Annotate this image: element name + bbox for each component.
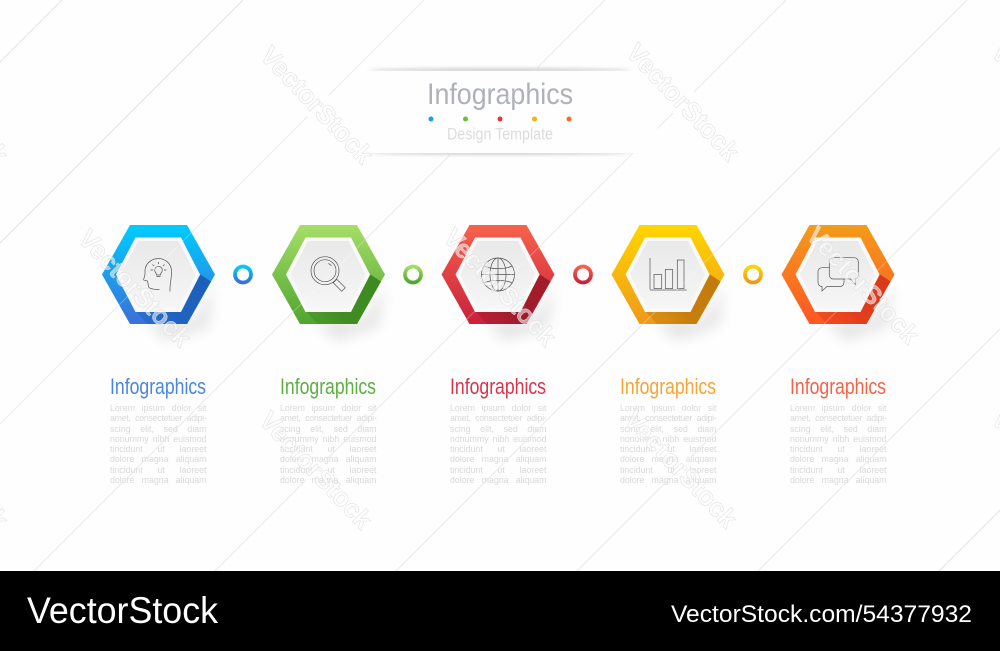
step 4 body text: tincidunt ut laoreet [620,444,716,454]
step 4 body text: tincidunt ut laoreet [620,465,716,475]
step 1 hexagon: blue [102,225,215,340]
icon: globe [482,258,514,291]
step 4 body text: amet, consectetuer adipi- [620,413,716,423]
title panel [332,68,668,155]
title text: Infographics [427,78,573,111]
connector ring 1 [235,266,251,282]
step 3 body text: dolore magna aliquam [450,475,546,485]
watermark overlay: VectorStock [800,220,926,350]
subtitle text: Design Template [447,124,553,144]
step 3 heading: Infographics [450,374,546,399]
step 1 heading: Infographics [110,374,206,399]
step 1 body text: Lorem ipsum dolor sit [110,403,206,413]
step 1 body text: nonummy nibh euismod [110,434,206,444]
step 5 body text: amet, consectetuer adipi- [790,413,886,423]
step 3 body text [450,403,546,485]
step 4 body text: Lorem ipsum dolor sit [620,403,716,413]
step 1 body text: dolore magna aliquam [110,475,206,485]
step 2 body text: scing elit, sed diam [280,424,376,434]
step 2 body text: tincidunt ut laoreet [280,465,376,475]
icon: head with light bulb [144,258,172,292]
step 2 body text: dolore magna aliquam [280,454,376,464]
step 1 body text: amet, consectetuer adipi- [110,413,206,423]
step 2 body text: nonummy nibh euismod [280,434,376,444]
watermark overlay: VectorStock [437,222,563,352]
step 4 body text: scing elit, sed diam [620,424,716,434]
icon: bar chart [650,258,687,290]
connector ring 4 [745,266,761,282]
step 5 body text: dolore magna aliquam [790,454,886,464]
connector ring 3 [575,266,591,282]
connector ring 2 [405,266,421,282]
step 5 body text: tincidunt ut laoreet [790,444,886,454]
step 3 hexagon: red [442,225,554,340]
watermark overlay: VectorStock [618,404,744,534]
step 5 hexagon: orange [782,225,894,340]
watermark overlay: VectorStock [254,40,380,170]
step 2 body text [280,403,376,485]
step 3 body text: dolore magna aliquam [450,454,546,464]
watermark overlay: VectorStock [620,37,746,167]
step 1 body text: tincidunt ut laoreet [110,465,206,475]
step 4 body text: dolore magna aliquam [620,475,716,485]
watermark overlay: VectorStock [253,405,379,535]
step 4 heading: Infographics [620,374,716,399]
step 5 body text: Lorem ipsum dolor sit [790,403,886,413]
icon: speech bubbles [818,258,858,291]
step 4 body text: dolore magna aliquam [620,454,716,464]
step 3 body text: Lorem ipsum dolor sit [450,403,546,413]
step 2 body text: Lorem ipsum dolor sit [280,403,376,413]
step 5 body text [790,403,886,485]
step 3 body text: tincidunt ut laoreet [450,444,546,454]
footer brand: VectorStock [27,590,218,631]
step 4 body text: nonummy nibh euismod [620,434,716,444]
step 5 body text: tincidunt ut laoreet [790,465,886,475]
step 3 body text: amet, consectetuer adipi- [450,413,546,423]
step 1 body text: dolore magna aliquam [110,454,206,464]
footer band [0,571,1000,651]
step 5 body text: dolore magna aliquam [790,475,886,485]
title colour dots [428,116,572,122]
step 3 body text: tincidunt ut laoreet [450,465,546,475]
step 4 hexagon: yellow [612,225,724,340]
step 1 body text [110,403,206,485]
watermark overlay: VectorStock [72,223,198,353]
step 2 body text: tincidunt ut laoreet [280,444,376,454]
step 4 body text [620,403,716,485]
step 2 body text: dolore magna aliquam [280,475,376,485]
step 1 body text: scing elit, sed diam [110,424,206,434]
step 3 body text: scing elit, sed diam [450,424,546,434]
icon: magnifying glass [311,257,345,291]
step 2 hexagon: green [272,225,385,340]
step 5 body text: scing elit, sed diam [790,424,886,434]
step 5 heading: Infographics [790,374,886,399]
step 5 body text: nonummy nibh euismod [790,434,886,444]
step 1 body text: tincidunt ut laoreet [110,444,206,454]
step 2 heading: Infographics [280,374,376,399]
step 2 body text: amet, consectetuer adipi- [280,413,376,423]
step 3 body text: nonummy nibh euismod [450,434,546,444]
footer url: VectorStock.com/54377932 [671,601,972,628]
